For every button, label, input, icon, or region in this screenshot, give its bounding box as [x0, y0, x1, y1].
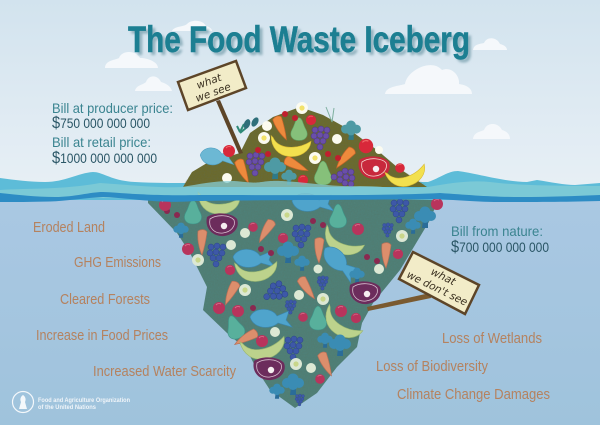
bill from nature	[451, 223, 549, 256]
producer and retail bills	[52, 100, 173, 167]
iceberg above water: food pile	[180, 102, 430, 192]
producer and retail bills: Bill at retail price:	[52, 134, 151, 150]
left cost labels: GHG Emissions	[74, 255, 161, 271]
clouds	[105, 21, 510, 139]
left cost labels	[33, 220, 237, 380]
FAO logo: of the United Nations	[38, 404, 96, 411]
sign: what we don't see: what	[429, 266, 458, 288]
bill from nature: $700 000 000 000	[451, 237, 549, 256]
left cost labels: Increase in Food Prices	[36, 328, 168, 344]
right cost labels: Loss of Biodiversity	[376, 359, 489, 375]
waterline band	[0, 181, 600, 202]
plants on the pile	[237, 107, 334, 133]
left cost labels: Increased Water Scarcity	[93, 364, 237, 380]
FAO logo: Food and Agriculture Organization	[38, 397, 130, 404]
title: The Food Waste Iceberg	[128, 18, 470, 60]
water ridge behind the pile	[0, 171, 600, 200]
bill from nature: Bill from nature:	[451, 223, 543, 239]
sign: what we see: we see	[194, 81, 233, 105]
sign: what we see: what	[195, 71, 224, 92]
right cost labels: Loss of Wetlands	[442, 331, 542, 347]
sea below the waterline	[0, 195, 600, 425]
sign: what we see	[178, 61, 246, 154]
left cost labels: Cleared Forests	[60, 292, 150, 308]
producer and retail bills: $1000 000 000 000	[52, 148, 157, 167]
iceberg below water	[145, 192, 443, 410]
right cost labels	[376, 331, 550, 403]
right cost labels: Climate Change Damages	[397, 387, 550, 403]
producer and retail bills: Bill at producer price:	[52, 100, 173, 116]
left cost labels: Eroded Land	[33, 220, 105, 236]
sign: what we don't see: we don't see	[405, 269, 469, 309]
title: The Food Waste Iceberg	[131, 21, 473, 63]
sign: what we don't see	[367, 252, 479, 314]
producer and retail bills: $750 000 000 000	[52, 113, 150, 132]
sky background	[0, 0, 600, 200]
FAO logo	[12, 392, 130, 412]
